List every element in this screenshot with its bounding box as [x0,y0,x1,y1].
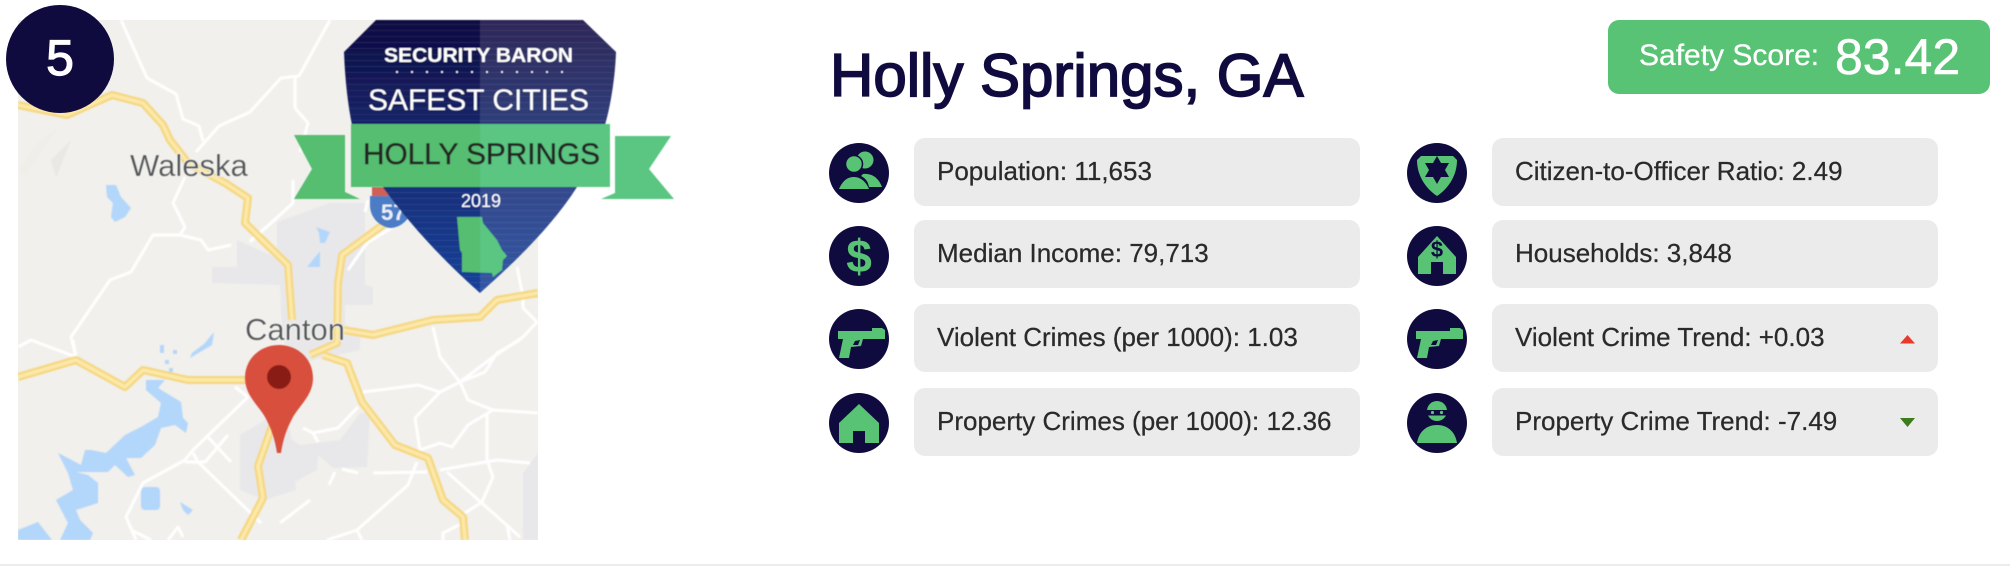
arrow: up red [1900,335,1915,344]
icon: dollar [829,226,889,286]
badge: safest cities shield [294,18,674,298]
icon: household: $ [1431,237,1443,262]
icon: house [829,393,889,453]
map pin [245,345,313,453]
rank circle [6,5,114,113]
stat: property crimes: Property Crimes (per 1000): 12.36 [937,406,1332,436]
badge year: 2019 [461,191,501,211]
right ribbon tail [601,136,674,199]
icon: dollar: $ [846,230,872,282]
stat: violent crime trend [1492,304,1938,372]
stat: households: Households: 3,848 [1515,238,1732,268]
stat: population [914,138,1360,206]
stat: violent crime trend: Violent Crime Trend: +0.03 [1515,322,1825,352]
stat: property crime trend: Property Crime Trend: -7.49 [1515,406,1837,436]
title: Holly Springs, GA [830,42,1304,109]
stat: violent crimes [914,304,1360,372]
stat: citizen to officer ratio: Citizen-to-Officer Ratio: 2.49 [1515,156,1843,186]
icon: handgun [829,309,889,369]
badge heading: Security Baron: SECURITY BARON [384,44,573,67]
icon: handgun [1407,309,1467,369]
score label: Safety Score: [1639,39,1819,72]
safety score badge [1608,20,1990,94]
badge dots [396,71,563,73]
icon: burglar [1407,393,1467,453]
arrow: down green [1900,418,1915,427]
left ribbon tail [294,135,360,199]
ribbon banner [351,124,610,187]
banner text: Holly Springs: HOLLY SPRINGS [363,138,600,171]
map image [18,20,538,540]
map label: Waleska: Waleska [130,148,248,183]
stat: citizen to officer ratio [1492,138,1938,206]
icon: police shield [1407,143,1467,203]
icon: household [1407,226,1467,286]
rank circle: 5 [46,30,74,86]
icon: population [829,143,889,203]
score value: 83.42 [1835,29,1960,85]
interstate marker [370,187,412,228]
badge heading: Safest Cities: SAFEST CITIES [368,84,589,117]
stat: median income: Median Income: 79,713 [937,238,1209,268]
stat: property crimes [914,388,1360,456]
map with location badge [18,19,674,540]
stat: population: Population: 11,653 [937,156,1152,186]
stat: violent crimes: Violent Crimes (per 1000): 1.03 [937,322,1298,352]
stat: property crime trend [1492,388,1938,456]
Georgia state silhouette [457,217,507,277]
stat: households [1492,220,1938,288]
stat: median income [914,220,1360,288]
interstate marker: 57 [381,200,405,225]
map label: Canton: Canton [245,312,345,347]
